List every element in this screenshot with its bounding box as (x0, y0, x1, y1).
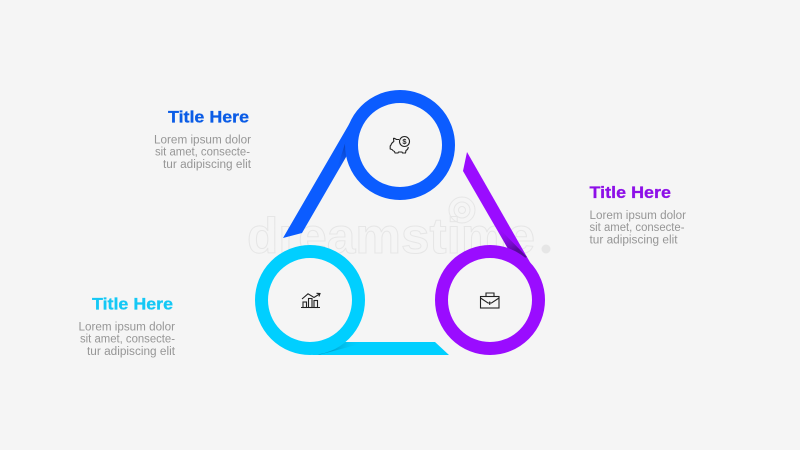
description: Lorem ipsum dolor (154, 134, 251, 146)
description (154, 134, 252, 171)
description: tur adipiscing elit (163, 159, 252, 171)
watermark: dreamstime (247, 208, 535, 264)
cyan tail shadow (318, 342, 368, 355)
cycle segment: blue (283, 96, 448, 238)
icon: growth chart (301, 293, 320, 308)
description: Lorem ipsum dolor (590, 210, 686, 222)
description (78, 322, 176, 358)
description: tur adipiscing elit (87, 346, 176, 358)
description: Lorem ipsum dolor (78, 322, 175, 334)
heading: Title Here (590, 183, 671, 202)
icon: briefcase (480, 293, 499, 308)
heading: Title Here (92, 294, 173, 314)
text block: purple step (590, 183, 686, 246)
purple ring (442, 252, 538, 348)
description: tur adipiscing elit (590, 234, 678, 246)
text block: cyan step (78, 294, 176, 358)
description (590, 210, 686, 246)
cycle segment: purple (442, 152, 538, 348)
purple tail shadow (492, 221, 527, 262)
blue arrow tail (283, 114, 360, 238)
description: sit amet, consecte- (155, 146, 250, 158)
text block: blue step (154, 108, 252, 171)
cyan arrow tail (312, 342, 449, 355)
cycle segment: cyan (262, 252, 449, 355)
icon: piggy bank (390, 136, 410, 153)
blue ring (352, 96, 448, 194)
cyan ring (262, 252, 358, 348)
blue tail shadow (334, 128, 358, 178)
purple arrow tail (463, 152, 531, 275)
heading: Title Here (168, 108, 249, 126)
description: sit amet, consecte- (590, 222, 685, 234)
icon: piggy bank: $ (402, 137, 407, 146)
description: sit amet, consecte- (80, 334, 175, 346)
